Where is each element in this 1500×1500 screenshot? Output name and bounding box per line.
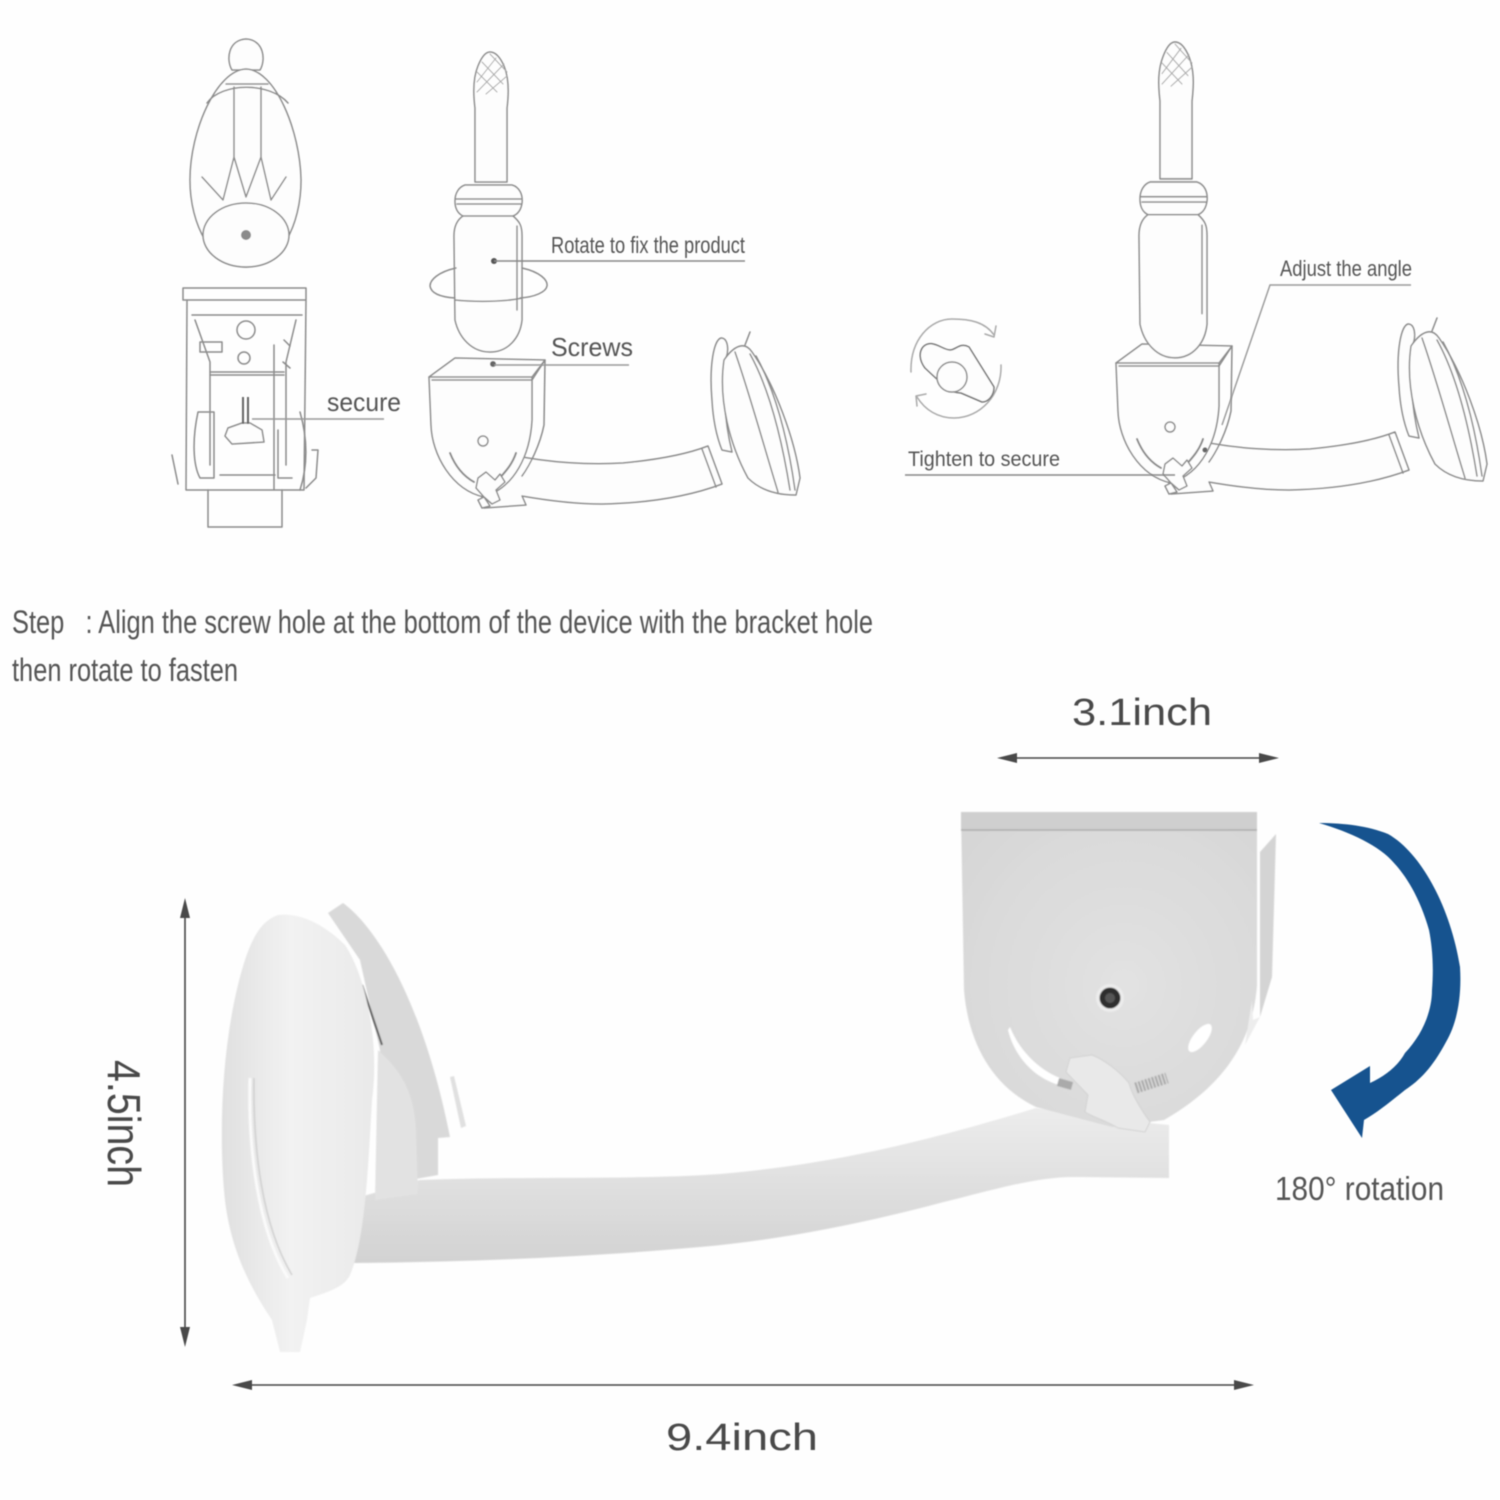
- dimension: length 9.4 inch: 9.4inch: [666, 1417, 818, 1459]
- label: rotate to fix the product: [491, 232, 745, 264]
- label: adjust the angle: [1202, 256, 1412, 452]
- product photo: suction mount bracket: [222, 812, 1276, 1352]
- step instruction text: Step : Align the screw hole at the bottom of the device with the bracket hole: [12, 604, 873, 640]
- dimension: width 3.1 inch: [997, 692, 1279, 763]
- label: 180 degree rotation: 180° rotation: [1275, 1170, 1444, 1207]
- dimension: height 4.5 inch: 4.5inch: [98, 1060, 150, 1187]
- icon: wing nut rotation: [911, 319, 1001, 418]
- label: rotate to fix the product: Rotate to fix the product: [551, 232, 745, 258]
- installation diagrams panel: [172, 39, 1487, 527]
- dimension: width 3.1 inch: 3.1inch: [1072, 692, 1212, 734]
- label: tighten to secure: Tighten to secure: [908, 448, 1060, 471]
- icon: device mounted on bracket, step two: [1116, 42, 1487, 494]
- icon: bracket rear view: [172, 288, 318, 527]
- dimension: height 4.5 inch: [98, 898, 190, 1347]
- bracket body: [961, 812, 1257, 1127]
- arm: [350, 1108, 1169, 1263]
- label: screws: [494, 332, 633, 365]
- wing nut: [1066, 1055, 1150, 1132]
- bracket flange: [1260, 834, 1276, 1017]
- label: screws: Screws: [551, 332, 633, 362]
- step instruction text: then rotate to fasten: [12, 652, 238, 688]
- label: secure: secure: [327, 387, 401, 417]
- arrow: 180 degree rotation: [1319, 823, 1460, 1138]
- label: adjust the angle: Adjust the angle: [1280, 256, 1412, 281]
- adjustment slots: [1008, 1027, 1060, 1085]
- suction plate: [328, 903, 450, 1180]
- icon: device base view: [190, 39, 301, 267]
- suction cup: [222, 915, 374, 1352]
- icon: device above bracket, step one: [429, 52, 800, 508]
- step instruction text: [12, 604, 873, 688]
- dimension: length 9.4 inch: [232, 1380, 1254, 1459]
- bracket pivot hole: [1096, 984, 1124, 1012]
